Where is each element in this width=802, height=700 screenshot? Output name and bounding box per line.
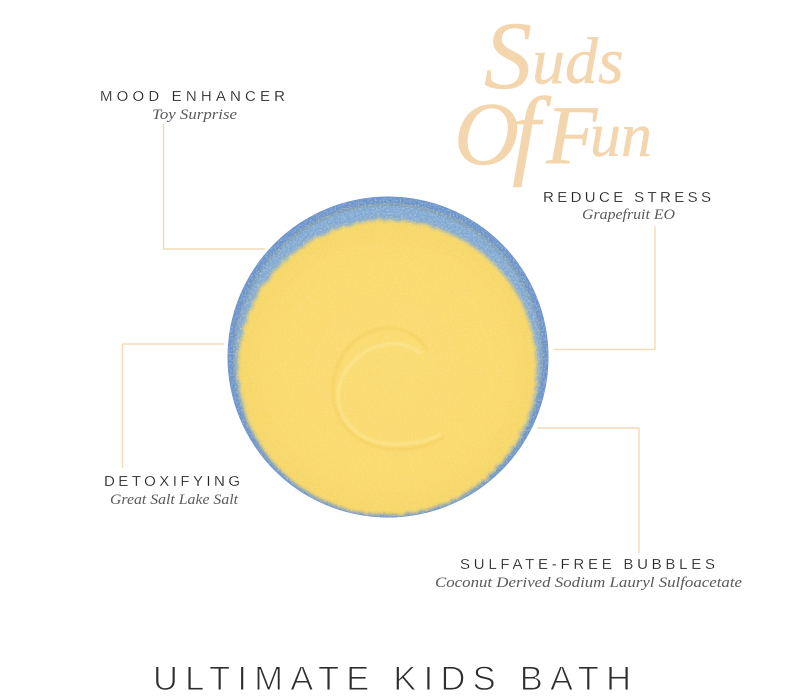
footer heading: ULTIMATE KIDS BATH <box>153 660 631 698</box>
infographic canvas <box>101 24 742 690</box>
callout: mood enhancer: Toy Surprise <box>152 107 238 123</box>
embossed C logo <box>333 328 443 449</box>
callout: mood enhancer <box>100 88 285 249</box>
callout: reduce stress: REDUCE STRESS <box>543 189 711 206</box>
title: Suds Of Fun: F <box>545 89 599 182</box>
callout: mood enhancer: MOOD ENHANCER <box>100 88 285 105</box>
title: Suds Of Fun: O <box>454 85 519 184</box>
callout: sulfate-free bubbles: SULFATE-FREE BUBBLES <box>460 556 715 573</box>
title: Suds Of Fun: f <box>512 77 552 188</box>
title: Suds Of Fun: un <box>590 102 652 170</box>
product photo: round bath bomb <box>228 196 549 518</box>
title: Suds Of Fun: S <box>484 2 532 109</box>
callout: sulfate-free bubbles <box>435 428 743 591</box>
callout: detoxifying: Great Salt Lake Salt <box>110 492 239 508</box>
callout: detoxifying: DETOXIFYING <box>104 473 240 490</box>
callout: reduce stress <box>543 189 711 350</box>
callout: detoxifying <box>104 344 240 508</box>
title: Suds Of Fun: uds <box>532 25 624 98</box>
callout: reduce stress: Grapefruit EO <box>582 207 676 223</box>
title: Suds Of Fun <box>454 2 652 188</box>
callout: sulfate-free bubbles: Coconut Derived Sodium Lauryl Sulfoacetate <box>435 575 743 591</box>
